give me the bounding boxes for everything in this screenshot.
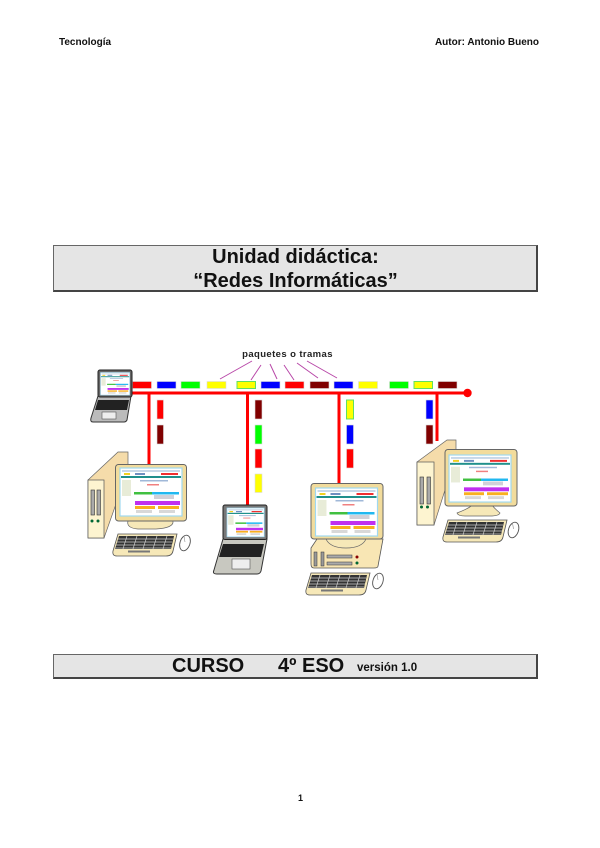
packets on bus	[132, 382, 457, 388]
course: version: versión 1.0	[357, 662, 417, 674]
packet pointers	[220, 361, 337, 380]
title text: “Redes Informáticas”	[193, 270, 398, 292]
network bus	[131, 389, 472, 506]
course: level: 4º ESO	[278, 655, 344, 677]
laptop: top left	[91, 370, 132, 422]
title text	[193, 246, 398, 292]
packets label: paquetes o tramas	[242, 349, 333, 360]
computer: tower left	[88, 452, 192, 556]
course: CURSO: CURSO	[172, 655, 244, 677]
computer: desktop centre	[306, 484, 385, 595]
title panel	[53, 245, 538, 292]
page number: 1	[298, 793, 303, 803]
packets on branch lines	[157, 400, 433, 492]
header: author: Autor: Antonio Bueno	[435, 37, 539, 48]
title text: Unidad didáctica:	[212, 246, 379, 268]
computer: tower right	[417, 440, 521, 542]
header: subject: Tecnología	[59, 37, 111, 48]
laptop: bottom centre	[213, 505, 267, 574]
course panel	[53, 654, 538, 679]
